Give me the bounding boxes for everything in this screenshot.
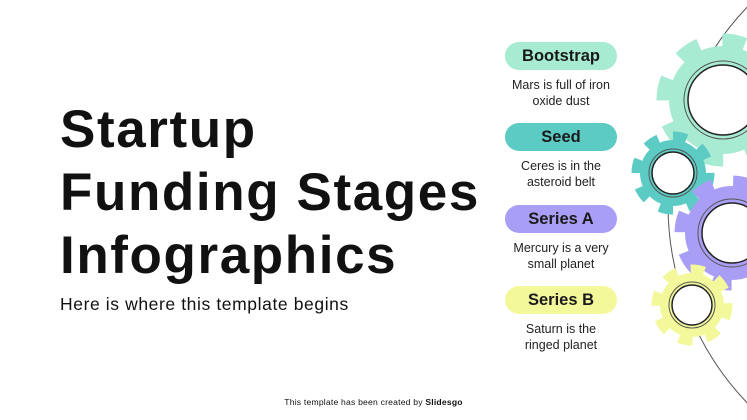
text: bootstrap desc	[512, 78, 610, 108]
text: series A desc	[513, 241, 609, 271]
text: bootstrap desc: Mars is full of iron	[512, 78, 610, 92]
title: Funding Stages	[60, 163, 480, 222]
pill: Seed: Seed	[541, 128, 581, 146]
pill: Series A	[505, 205, 617, 233]
text: seed desc: Ceres is in the	[521, 159, 601, 173]
text: bootstrap desc: oxide dust	[532, 94, 589, 108]
pill: Bootstrap	[505, 42, 617, 70]
gear: yellow	[656, 269, 728, 341]
title: Infographics	[60, 226, 397, 285]
pill: Seed	[505, 123, 617, 151]
gear: purple	[680, 181, 747, 285]
text: seed desc: asteroid belt	[527, 175, 595, 189]
gear: teal	[636, 136, 710, 210]
gear: mint	[663, 40, 747, 160]
text: series A desc: Mercury is a very	[513, 241, 609, 255]
title	[60, 100, 480, 285]
pill: Series B	[505, 286, 617, 314]
title: Startup	[60, 100, 257, 159]
text: series B desc: ringed planet	[525, 338, 597, 352]
text: seed desc	[521, 159, 601, 189]
pill: Bootstrap: Bootstrap	[522, 47, 600, 65]
text: series B desc	[525, 322, 597, 352]
pill: Series B: Series B	[528, 291, 594, 309]
text: series A desc: small planet	[528, 257, 594, 271]
footer: This template has been created by Slidesgo	[284, 397, 463, 407]
subtitle: Here is where this template begins	[60, 294, 349, 314]
pill: Series A: Series A	[528, 210, 594, 228]
text: series B desc: Saturn is the	[526, 322, 596, 336]
